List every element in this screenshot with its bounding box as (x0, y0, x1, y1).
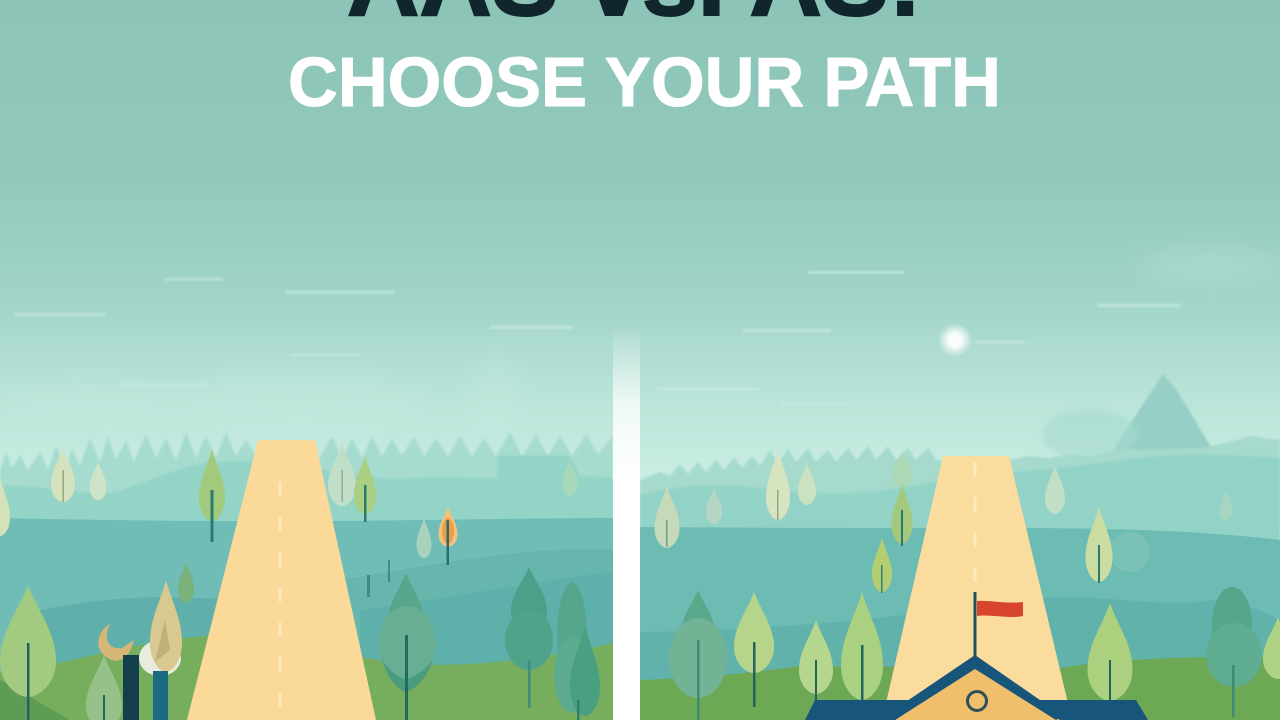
tree: front five (1088, 603, 1132, 702)
post dark (123, 655, 139, 720)
tree: front three (799, 620, 833, 702)
subtitle: CHOOSE YOUR PATH (288, 43, 1001, 121)
school building (805, 592, 1148, 720)
near band right (640, 597, 1280, 680)
tree: front left (0, 585, 56, 720)
far hill right (640, 455, 1280, 542)
ground right (640, 657, 1280, 720)
pale distant trees left (0, 444, 578, 558)
road: right (886, 456, 1068, 700)
tree: green mid right (354, 456, 376, 522)
tree: green upper right (892, 484, 912, 546)
tree: edge (1263, 617, 1280, 679)
white blob (139, 640, 181, 676)
ground shadow (0, 680, 70, 720)
distant forest left (0, 432, 613, 494)
near hill left (40, 597, 218, 664)
road dashes (974, 462, 976, 590)
round window (968, 692, 986, 710)
ground left (0, 635, 613, 720)
tree: orange (438, 507, 458, 565)
post teal (153, 671, 168, 720)
tree: front two (734, 592, 774, 707)
tree: round large (378, 573, 436, 720)
small stumps (367, 560, 390, 597)
near teal hill (368, 572, 613, 610)
tree: front four (841, 592, 883, 700)
panel: left landscape (0, 432, 613, 720)
side roof (805, 700, 1148, 720)
tan crescent (98, 624, 134, 661)
tree: tall teal (505, 567, 553, 708)
flag pole (974, 592, 976, 658)
near hill right left-panel (346, 550, 613, 644)
mid band right (640, 527, 1280, 632)
sun (939, 324, 971, 356)
pale distant trees right (654, 450, 1232, 548)
tree: small front (86, 655, 122, 720)
divider (613, 325, 640, 720)
tan tree (150, 580, 182, 672)
mid band left (0, 518, 613, 672)
gable wall (895, 668, 1060, 720)
faint circle (1110, 532, 1150, 572)
thin cloud streaks (14, 271, 1181, 404)
haze near mountain (1042, 410, 1135, 456)
tree: tall double (554, 582, 600, 720)
road: left (187, 440, 376, 720)
tree: green mid left (199, 449, 225, 542)
red flag (977, 601, 1023, 617)
tree: small olive (872, 538, 892, 593)
tree: round front left (669, 590, 727, 720)
road dashes (278, 482, 282, 720)
leaf: small green (178, 562, 194, 603)
far hill left (0, 456, 613, 522)
tree: round front right (1206, 587, 1262, 717)
distant forest right (640, 436, 1280, 530)
gable roof (885, 655, 1063, 720)
mountain (1112, 374, 1214, 452)
panel: right landscape (640, 323, 1280, 720)
haze clouds (0, 249, 1280, 435)
tree: pale right (1086, 507, 1112, 583)
